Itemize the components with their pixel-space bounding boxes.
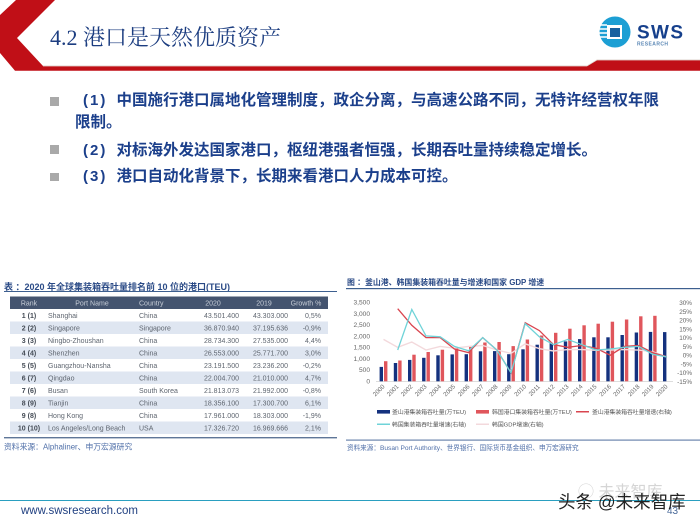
- year labels: 2002: [400, 383, 415, 398]
- year labels: 2014: [570, 383, 585, 398]
- table rows: China: [139, 313, 157, 320]
- table rows: 23.191.500: [204, 363, 239, 370]
- table rows: 6,1%: [305, 400, 321, 408]
- table rows: 21.010.000: [253, 376, 288, 382]
- left axis labels: 3,000: [353, 311, 370, 318]
- year labels: 2009: [499, 383, 514, 398]
- right axis labels: 5%: [683, 344, 692, 351]
- bullet text 1: 中国施行港口属地化管理制度，政企分离，与高速公路不同，无特许经营权年限: [116, 92, 659, 109]
- chart legend: 韩国港口集装箱吞吐量(万TEU): [492, 408, 572, 416]
- table rows: 21.813.073: [204, 388, 239, 395]
- table rows: 21.992.000: [253, 388, 288, 395]
- table rows: Shenzhen: [48, 350, 80, 358]
- table rows: 43.303.000: [253, 313, 288, 320]
- table rows: 36.870.940: [204, 326, 239, 332]
- table rows: China: [139, 413, 157, 420]
- watermark: 头条 @未来智库: [558, 492, 686, 512]
- table rows: -0,2%: [303, 363, 321, 370]
- year labels: 2015: [584, 383, 599, 398]
- table rows: China: [139, 400, 157, 408]
- table header row: 2019: [256, 300, 272, 308]
- bullet marker 2: [50, 145, 58, 154]
- year labels: 2016: [598, 383, 613, 398]
- table rows: Tianjin: [48, 400, 68, 408]
- year labels: 2017: [612, 383, 627, 398]
- bullet text 1: 限制。: [75, 114, 122, 131]
- right axis labels: 30%: [679, 300, 692, 307]
- table rows: Qingdao: [48, 376, 75, 382]
- table rows: 25.771.700: [253, 350, 288, 358]
- table heading: 表 ：2020 年全球集装箱吞吐量排名前 10 位的港口(TEU): [4, 281, 230, 292]
- table rows: Hong Kong: [48, 413, 83, 420]
- table header row: Country: [139, 300, 164, 308]
- table rows: 43.501.400: [204, 313, 239, 320]
- year labels: 2001: [386, 383, 401, 398]
- table rows: Singapore: [139, 326, 171, 332]
- table rows: 7 (6): [22, 388, 36, 395]
- table rows: 2 (2): [22, 326, 36, 332]
- table header row: Growth %: [291, 300, 321, 308]
- table rows: 4,7%: [305, 376, 321, 382]
- left axis labels: 2,000: [353, 333, 370, 340]
- year labels: 2011: [528, 383, 542, 398]
- bars: Busan throughput: [380, 332, 666, 381]
- chart heading: 图 ：釜山港、韩国集装箱吞吐量与增速和国家 GDP 增速: [347, 277, 544, 287]
- footer website: www.swsresearch.com: [21, 505, 138, 517]
- bullet text 1: [75, 92, 659, 131]
- table rows: 1 (1): [22, 313, 36, 320]
- left axis labels: 500: [359, 367, 370, 374]
- page number: 43: [667, 506, 678, 517]
- table rows: 18.356.100: [204, 400, 239, 408]
- bullet text 3: (3): [83, 168, 107, 185]
- table rows: 9 (8): [22, 413, 36, 420]
- year labels: 2000: [372, 383, 387, 398]
- year labels: 2003: [414, 383, 429, 398]
- table rows: 3 (3): [22, 338, 36, 345]
- table rows: 2,1%: [305, 426, 321, 432]
- table rows: 6 (7): [22, 376, 36, 382]
- chart legend: 釜山港集装箱吞吐量(万TEU): [392, 408, 466, 416]
- logo: RESEARCH: [637, 42, 668, 48]
- table rows: Guangzhou-Nansha: [48, 363, 111, 370]
- chart legend: 韩国GDP增速(右轴): [492, 420, 544, 428]
- bullet text 2: 对标海外发达国家港口，枢纽港强者恒强，长期吞吐量持续稳定增长。: [116, 142, 597, 158]
- bullet marker 1: [50, 97, 58, 106]
- table header row: Rank: [21, 300, 38, 308]
- footer line: [0, 500, 700, 501]
- left axis labels: 0: [366, 378, 370, 386]
- table rows: Los Angeles/Long Beach: [48, 426, 126, 432]
- year labels: [372, 383, 670, 398]
- line: Busan growth: [398, 309, 667, 373]
- year labels: 2019: [641, 383, 656, 398]
- table panel: [4, 281, 337, 452]
- right axis labels: [677, 300, 692, 386]
- right axis labels: 20%: [679, 318, 692, 324]
- watermark faded: ◯ 未来智库: [578, 484, 662, 501]
- table header row: Port Name: [75, 300, 109, 308]
- table rows: 4 (4): [22, 350, 36, 358]
- table rows: 18.303.000: [253, 413, 288, 420]
- table rows: Shanghai: [48, 313, 78, 320]
- left axis labels: 2,500: [353, 322, 370, 329]
- chart legend: [377, 408, 672, 428]
- table rows: Ningbo-Zhoushan: [48, 338, 104, 345]
- year labels: 2008: [485, 383, 500, 398]
- year labels: 2010: [513, 383, 528, 398]
- table source: 资料来源：Alphaliner、申万宏源研究: [4, 442, 132, 452]
- bullet text 1: (1): [83, 92, 107, 109]
- table rows: 16.969.666: [253, 426, 288, 432]
- table rows: 26.553.000: [204, 350, 239, 358]
- right axis labels: -10%: [677, 370, 692, 377]
- right axis labels: -5%: [681, 361, 692, 368]
- right axis labels: 0%: [683, 353, 692, 360]
- table header row: 2020: [205, 300, 221, 308]
- chart legend: 釜山港集装箱吞吐量增速(右轴): [592, 408, 672, 416]
- table rows: China: [139, 338, 157, 345]
- table rows: China: [139, 376, 157, 382]
- table rows: Singapore: [48, 326, 80, 332]
- left axis labels: [353, 300, 370, 386]
- table rows: 3,0%: [305, 350, 321, 358]
- table rows: 28.734.300: [204, 338, 239, 345]
- line: Korea growth: [398, 310, 667, 373]
- table rows: 17.961.000: [204, 413, 239, 420]
- right axis labels: -15%: [677, 379, 692, 386]
- year labels: 2012: [542, 383, 557, 398]
- bullet text 2: (2): [83, 142, 107, 158]
- table rows: 17.300.700: [253, 400, 288, 408]
- year labels: 2005: [442, 383, 457, 398]
- logo: SWS: [637, 22, 683, 44]
- title: 4.2 港口是天然优质资产: [50, 25, 281, 50]
- chart legend: 韩国集装箱吞吐量增速(右轴): [392, 420, 466, 428]
- table rows: Busan: [48, 388, 68, 395]
- table rows: 22.004.700: [204, 376, 239, 382]
- table rows: -1,9%: [303, 413, 321, 420]
- bullet text 3: 港口自动化背景下，长期来看港口人力成本可控。: [116, 168, 458, 185]
- table header row: [10, 296, 328, 309]
- table rows: 10 (10): [18, 426, 40, 432]
- table rows: 37.195.636: [253, 326, 288, 332]
- table rows: China: [139, 350, 157, 358]
- left axis labels: 1,000: [353, 356, 370, 363]
- right axis labels: 10%: [679, 335, 692, 342]
- table rows: China: [139, 363, 157, 370]
- bars: Korea throughput: [384, 316, 657, 381]
- header band: [0, 0, 700, 71]
- table rows: USA: [139, 426, 154, 432]
- logo: [600, 16, 683, 48]
- year labels: 2020: [655, 383, 670, 398]
- year labels: 2018: [627, 383, 642, 398]
- chart source: 资料来源：Busan Port Authority、世界银行、国际货币基金组织、申万宏源研究: [347, 443, 579, 452]
- table rows: [10, 313, 328, 434]
- left axis labels: 1,500: [353, 345, 370, 352]
- right axis labels: 15%: [679, 326, 692, 333]
- table rows: 4,4%: [305, 338, 321, 345]
- line: Korea GDP growth: [384, 339, 667, 357]
- table rows: 5 (5): [22, 363, 36, 370]
- table rows: 0,5%: [305, 313, 321, 320]
- table rows: 8 (9): [22, 400, 36, 408]
- bullet marker 3: [50, 172, 58, 181]
- table rows: 27.535.000: [253, 338, 288, 345]
- table rows: -0,8%: [303, 388, 321, 395]
- right axis labels: 25%: [679, 309, 692, 316]
- year labels: 2013: [556, 383, 571, 398]
- year labels: 2006: [457, 383, 472, 398]
- year labels: 2004: [428, 383, 443, 398]
- table rows: 17.326.720: [204, 426, 239, 432]
- year labels: 2007: [471, 383, 486, 398]
- chart panel: [346, 277, 700, 452]
- table rows: -0,9%: [303, 326, 321, 332]
- table rows: 23.236.200: [253, 363, 288, 370]
- left axis labels: 3,500: [353, 300, 370, 306]
- table rows: South Korea: [139, 388, 178, 395]
